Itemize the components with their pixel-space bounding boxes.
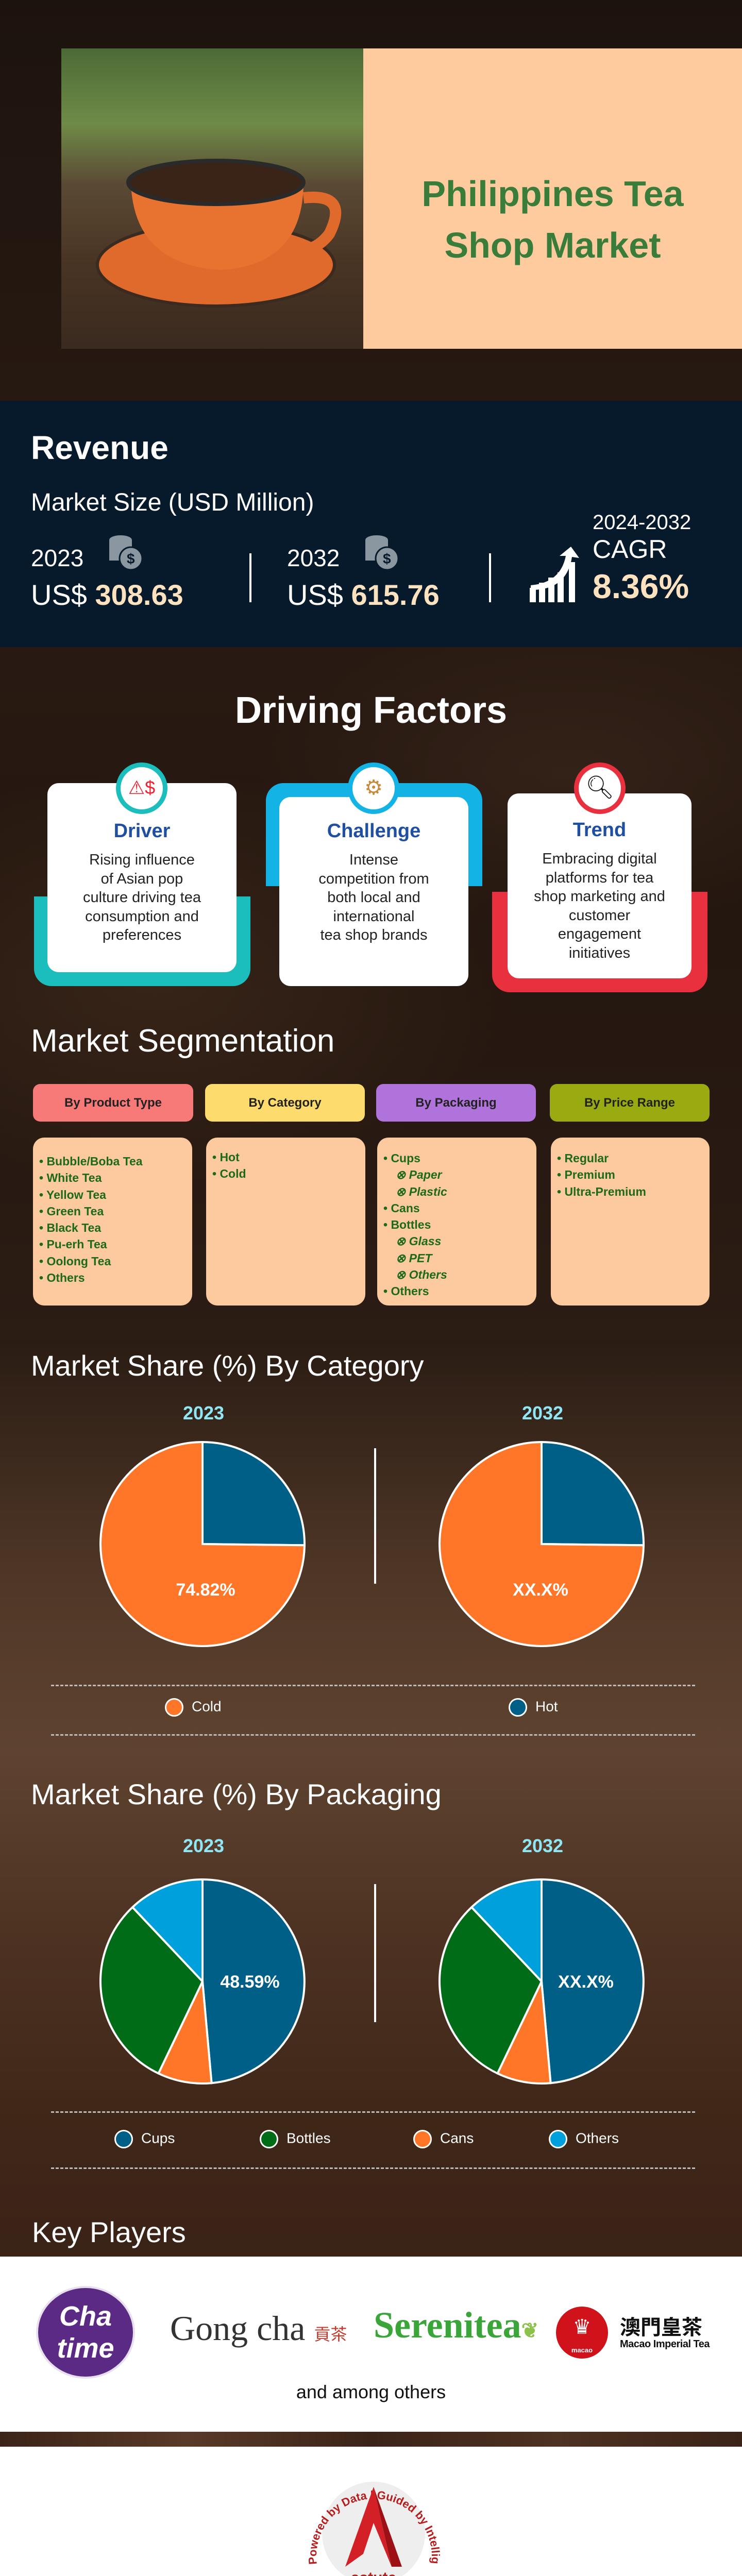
text: 2032 xyxy=(522,1835,563,1856)
driver card xyxy=(47,783,237,972)
segment list: packaging: ⊗ Plastic xyxy=(396,1185,447,1198)
text: By Price Range xyxy=(584,1096,675,1110)
icon: coins xyxy=(109,535,141,569)
icon: driver: ⚠$ xyxy=(128,777,155,798)
challenge card xyxy=(279,797,468,986)
driver card: Rising influence xyxy=(89,852,195,868)
pie chart: category 2032: XX.X% xyxy=(513,1580,568,1600)
icon: driver xyxy=(116,762,167,814)
heading: driving factors: Driving Factors xyxy=(235,690,507,731)
2032 value xyxy=(287,535,440,611)
title panel: Philippines Tea xyxy=(421,174,684,214)
segment list: product type: • Pu-erh Tea xyxy=(39,1238,107,1251)
legend: packaging: Bottles xyxy=(286,2130,331,2146)
2032 value: US$ 615.76 xyxy=(287,579,440,611)
heading: key players: Key Players xyxy=(32,2216,186,2248)
segment header pills xyxy=(33,1084,193,1122)
challenge card: both local and xyxy=(327,889,420,906)
footer xyxy=(0,2447,742,2576)
segment list: product type: • Black Tea xyxy=(39,1221,101,1234)
market size label: Market Size (USD Million) xyxy=(31,489,314,516)
logo: macao imperial tea: ♛ xyxy=(573,2316,591,2338)
segment list: packaging: • Bottles xyxy=(383,1218,431,1231)
logo: macao imperial tea xyxy=(556,2307,710,2359)
text: By Category xyxy=(248,1096,322,1110)
segment list: packaging: • Others xyxy=(383,1284,429,1298)
logo: chatime xyxy=(36,2286,135,2379)
CAGR: 2024-2032 xyxy=(593,511,691,534)
pie chart: packaging 2032: XX.X% xyxy=(558,1972,614,1992)
trend card: engagement xyxy=(558,926,641,942)
CAGR: CAGR xyxy=(593,535,667,564)
trend card: platforms for tea xyxy=(546,870,653,886)
segment list: packaging: ⊗ Paper xyxy=(396,1168,442,1181)
segment list: price range xyxy=(551,1138,710,1306)
trend card: Embracing digital xyxy=(542,851,657,867)
segment list: product type: • Others xyxy=(39,1271,85,1284)
segment list: packaging: ⊗ Glass xyxy=(396,1234,441,1248)
text: By Packaging xyxy=(415,1096,497,1110)
panel: trend xyxy=(492,762,707,992)
challenge card: tea shop brands xyxy=(321,927,427,943)
logo: astute analytica xyxy=(309,2482,440,2576)
icon: growth chart xyxy=(530,547,579,602)
hero photo xyxy=(61,48,363,349)
segment list: product type: • Oolong Tea xyxy=(39,1255,111,1268)
segment header pills: By Product Type xyxy=(64,1096,162,1110)
segment list: packaging: ⊗ PET xyxy=(396,1251,432,1265)
heading: market segmentation: Market Segmentation xyxy=(31,1023,334,1059)
pie chart: packaging 2023: 48.59% xyxy=(220,1972,280,1992)
icon: trend xyxy=(574,762,626,814)
driver card: of Asian pop xyxy=(101,871,183,887)
logo: macao imperial tea: 澳門皇茶 xyxy=(620,2316,702,2339)
title panel: Shop Market xyxy=(444,225,661,265)
legend: packaging: Cans xyxy=(440,2130,474,2146)
segment list: category xyxy=(206,1138,365,1306)
panel: driver xyxy=(34,762,250,986)
CAGR xyxy=(593,511,691,564)
segment list: price range: • Ultra-Premium xyxy=(557,1185,646,1198)
segment list: packaging xyxy=(377,1138,536,1306)
text: 2032 xyxy=(522,1402,563,1423)
text: 2023 xyxy=(183,1835,224,1856)
text: Hot xyxy=(535,1698,558,1714)
heading: market share by packaging: Market Share (%) By Packaging xyxy=(31,1778,442,1810)
wood strip xyxy=(0,2432,742,2447)
segment list: packaging: • Cans xyxy=(383,1201,420,1215)
text: and among others: and among others xyxy=(296,2381,446,2402)
heading: market share by category: Market Share (%) By Category xyxy=(31,1349,424,1382)
segment list: product type: • White Tea xyxy=(39,1171,102,1184)
segment list: product type xyxy=(33,1138,192,1306)
legend: category xyxy=(165,1698,222,1717)
revenue heading: Revenue xyxy=(31,429,168,466)
text: 2023 xyxy=(183,1402,224,1423)
legend: packaging: Cups xyxy=(141,2130,175,2146)
2023 value xyxy=(31,535,183,611)
pie chart: category 2032 xyxy=(439,1441,645,1647)
challenge card: Intense xyxy=(349,852,398,868)
segment list: category: • Hot xyxy=(212,1150,240,1164)
driver card: culture driving tea xyxy=(83,889,201,906)
divider xyxy=(249,553,251,602)
divider xyxy=(489,553,491,602)
trend card: Trend xyxy=(573,819,626,841)
panel: challenge xyxy=(266,762,482,986)
2023 value: 2023 xyxy=(31,545,83,571)
segment list: packaging: ⊗ Others xyxy=(396,1268,447,1281)
pie chart: packaging 2032 xyxy=(439,1878,645,2084)
segment list: price range: • Regular xyxy=(557,1151,609,1165)
icon: challenge: ⚙ xyxy=(364,776,383,799)
trend card: customer xyxy=(569,907,630,923)
revenue band: 8.36% xyxy=(593,567,689,605)
logo: gong cha: Gong cha 貢茶 xyxy=(170,2309,347,2348)
pie chart: packaging 2023 xyxy=(99,1878,306,2084)
trend card xyxy=(508,793,692,978)
segment list: category: • Cold xyxy=(212,1167,246,1180)
panel: key players logos xyxy=(0,2257,742,2432)
revenue band xyxy=(0,401,742,647)
driver card: consumption and xyxy=(85,908,199,924)
pie chart: category 2023 xyxy=(99,1441,306,1647)
challenge card: Challenge xyxy=(327,820,420,842)
title panel xyxy=(363,48,742,349)
logo: macao imperial tea: Macao Imperial Tea xyxy=(620,2338,710,2350)
2032 value: 2032 xyxy=(287,545,340,571)
logo: macao imperial tea: macao xyxy=(571,2346,593,2354)
icon: coins: $ xyxy=(127,551,135,567)
logo: chatime: Cha xyxy=(59,2301,112,2332)
icon: trend: 🔍︎ xyxy=(585,775,614,800)
divider xyxy=(374,1448,376,1584)
legend: packaging: Others xyxy=(576,2130,619,2146)
legend: packaging xyxy=(114,2130,619,2148)
driver card: Driver xyxy=(114,820,170,842)
legend: category: Cold xyxy=(192,1698,222,1714)
segment list: product type: • Bubble/Boba Tea xyxy=(39,1155,143,1168)
divider xyxy=(374,1884,376,2022)
logo: chatime: time xyxy=(57,2333,114,2364)
icon: coins: $ xyxy=(383,551,391,567)
challenge card: international xyxy=(333,908,414,924)
segment list: packaging: • Cups xyxy=(383,1151,420,1165)
trend card: shop marketing and xyxy=(534,888,665,905)
challenge card: competition from xyxy=(318,871,429,887)
segment list: product type: • Green Tea xyxy=(39,1205,104,1218)
2023 value: US$ 308.63 xyxy=(31,579,183,611)
icon: challenge xyxy=(348,762,399,814)
trend card: initiatives xyxy=(569,945,630,961)
driver card: preferences xyxy=(103,927,181,943)
segment list: price range: • Premium xyxy=(557,1168,615,1181)
icon: coins xyxy=(365,535,398,569)
segment list: product type: • Yellow Tea xyxy=(39,1188,106,1201)
pie chart: category 2023: 74.82% xyxy=(176,1580,235,1600)
logo: serenitea: Serenitea❦ xyxy=(374,2304,538,2346)
